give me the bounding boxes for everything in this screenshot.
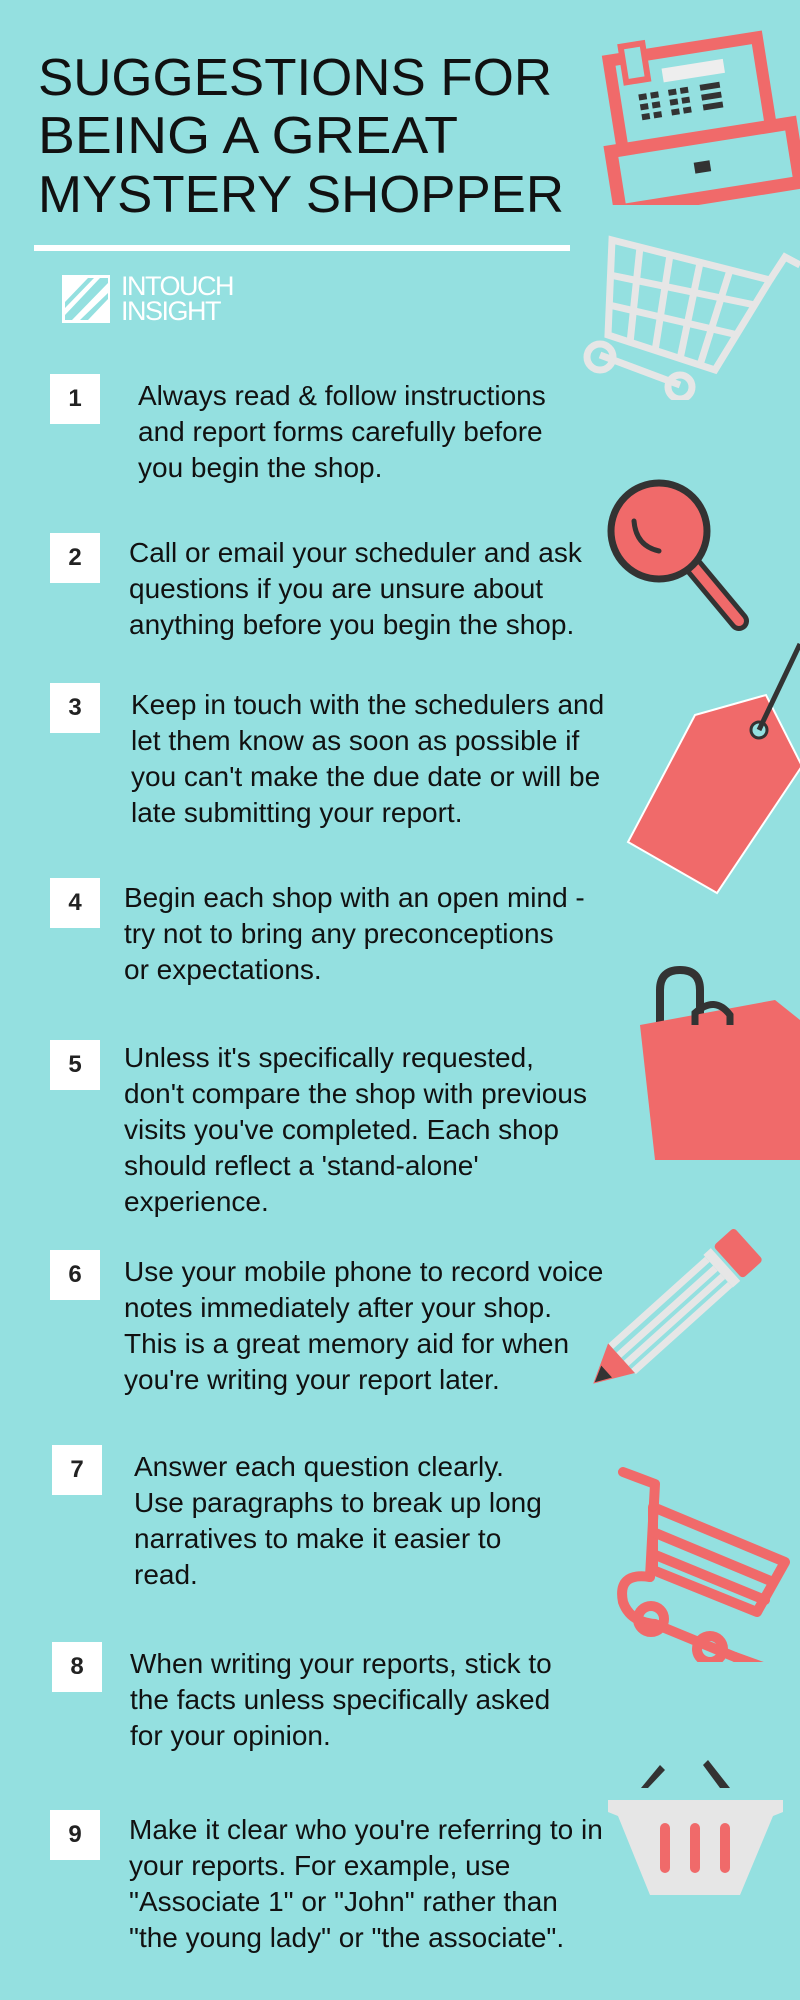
icon: pencil [593,1229,762,1384]
item 5: 5 [68,1051,82,1078]
item 6: This is a great memory aid for when [124,1328,569,1359]
item 7: Answer each question clearly. [134,1451,504,1482]
item 9: "the young lady" or "the associate". [129,1922,564,1953]
icon: basket [608,1760,783,1895]
item 2: anything before you begin the shop. [129,609,574,640]
item 2 [50,533,582,640]
item 7: 7 [70,1456,84,1483]
item 5: Unless it's specifically requested, [124,1042,534,1073]
item 9: your reports. For example, use [129,1850,510,1881]
item 3: let them know as soon as possible if [131,725,579,756]
logo: INTOUCH [121,271,233,301]
item 6 [50,1250,603,1395]
item 5: don't compare the shop with previous [124,1078,587,1109]
icon: cash register [602,30,800,205]
title [38,49,564,224]
item 4: 4 [68,889,82,916]
item 4: or expectations. [124,954,322,985]
item 8: When writing your reports, stick to [130,1648,552,1679]
item 5: should reflect a 'stand-alone' [124,1150,479,1181]
item 1: and report forms carefully before [138,416,543,447]
item 8: 8 [70,1653,84,1680]
item 3: you can't make the due date or will be [131,761,600,792]
item 4: try not to bring any preconceptions [124,918,554,949]
item 7: narratives to make it easier to [134,1523,501,1554]
item 6: Use your mobile phone to record voice [124,1256,603,1287]
item 3: late submitting your report. [131,797,462,828]
item 8: for your opinion. [130,1720,331,1751]
item 3: Keep in touch with the schedulers and [131,689,604,720]
item 7: Use paragraphs to break up long [134,1487,542,1518]
icon: magnifier [608,480,749,631]
title: SUGGESTIONS FOR [38,49,552,107]
item 9 [50,1810,603,1953]
item 2: questions if you are unsure about [129,573,543,604]
item 3 [50,683,604,828]
item 3: 3 [68,694,82,721]
item 5: experience. [124,1186,269,1217]
title: MYSTERY SHOPPER [38,166,564,224]
item 1: 1 [68,385,82,412]
item 6: you're writing your report later. [124,1364,500,1395]
item 9: Make it clear who you're referring to in [129,1814,603,1845]
item 1: you begin the shop. [138,452,382,483]
logo: INSIGHT [121,296,220,326]
item 9: 9 [68,1821,82,1848]
item 9: "Associate 1" or "John" rather than [129,1886,558,1917]
icon: shopping bag [640,966,800,1160]
icon: grey shopping cart [584,236,800,400]
item 4 [50,878,585,985]
item 7: read. [134,1559,198,1590]
item 8: the facts unless specifically asked [130,1684,550,1715]
item 8 [52,1642,552,1751]
item 5: visits you've completed. Each shop [124,1114,559,1145]
item 2: 2 [68,544,82,571]
item 1 [50,374,546,483]
item 6: 6 [68,1261,82,1288]
item 5 [50,1040,587,1217]
item 7 [52,1445,542,1590]
item 2: Call or email your scheduler and ask [129,537,582,568]
item 6: notes immediately after your shop. [124,1292,552,1323]
item 1: Always read & follow instructions [138,380,546,411]
logo [62,271,233,326]
item 4: Begin each shop with an open mind - [124,882,585,913]
title: BEING A GREAT [38,107,458,165]
icon: price tag [626,642,800,894]
icon: red shopping cart [617,1467,790,1662]
